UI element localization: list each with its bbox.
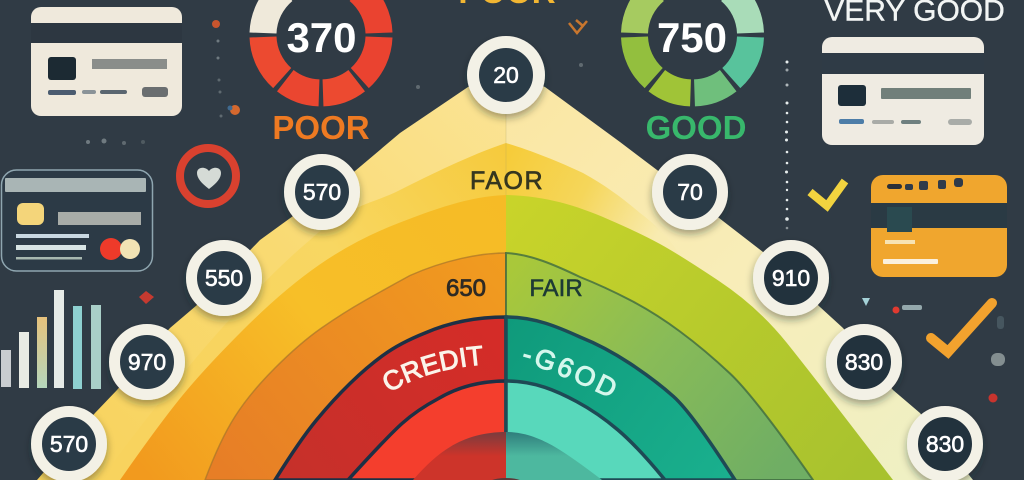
score marker: 830 [832, 330, 896, 394]
decoration: dotted divider right [785, 60, 789, 229]
arch chart: credit score bands [37, 72, 973, 480]
band: orange left [205, 253, 506, 480]
score marker: 970 [114, 330, 180, 394]
score marker: 830: 830 [845, 349, 883, 375]
band: dark red left [275, 317, 506, 480]
centre seam [506, 90, 507, 195]
band: yellow-green right [506, 195, 893, 480]
score marker: 830 lower [912, 412, 978, 476]
band: green right [506, 253, 813, 480]
gauge label: GOOD: GOOD [646, 109, 746, 146]
band: teal right [506, 317, 735, 480]
score marker: 20: 20 [493, 62, 519, 88]
band: inner teal right [506, 432, 602, 480]
score marker: 570: 570 [303, 179, 341, 205]
score marker: 910 [758, 246, 824, 310]
gauge label: POOR: POOR [272, 109, 370, 146]
score marker: 570 lower: 570 [50, 431, 88, 457]
icon: yellow check mark [810, 181, 845, 206]
band: bright red left [348, 381, 506, 480]
band: yellow right [506, 143, 760, 480]
icon: heart in red circle [180, 148, 236, 204]
gauge: 750 good: 750 [657, 14, 727, 61]
score marker: 550: 550 [205, 265, 243, 291]
credit card: top left [31, 7, 182, 116]
score marker: 830 lower: 830 [926, 431, 964, 457]
score marker: 570 [290, 160, 354, 224]
score marker: 70: 70 [677, 179, 703, 205]
band: innermost core [484, 478, 528, 480]
gauge: 370 poor [263, 0, 379, 93]
curved path guides and band label: CREDIT: CREDIT [383, 345, 482, 390]
curved path guides and band label: -G6OD [523, 350, 616, 396]
icon: orange check mark [931, 303, 992, 352]
band: light teal right [506, 381, 665, 480]
credit card: orange right [871, 175, 1007, 277]
band: outer pale yellow left [37, 72, 506, 480]
gauge: 370 poor: 370 [286, 14, 357, 61]
band: gold left [120, 195, 506, 480]
band: inner red left [413, 432, 506, 480]
band label: 650: 650 [446, 275, 486, 302]
score marker: 20 [473, 42, 539, 108]
credit card: outlined left [2, 170, 152, 271]
score marker: 70 [658, 160, 722, 224]
score marker: 970: 970 [128, 349, 166, 375]
score marker: 550 [192, 246, 256, 310]
band label: FAOR: FAOR [470, 167, 544, 195]
credit card: top right [822, 37, 984, 145]
bar chart [1, 290, 101, 389]
band: outer pale yellow right [506, 72, 973, 480]
band label: FAIR: FAIR [529, 275, 583, 302]
band: yellow left [100, 143, 506, 480]
score marker: 910: 910 [772, 265, 810, 291]
curved path guides and band label: -G6OD: -G6OD [523, 350, 616, 396]
gauge: 750 good [634, 0, 750, 93]
decoration: faint dots and specks [86, 20, 1005, 402]
score marker: 570 lower [36, 412, 102, 476]
